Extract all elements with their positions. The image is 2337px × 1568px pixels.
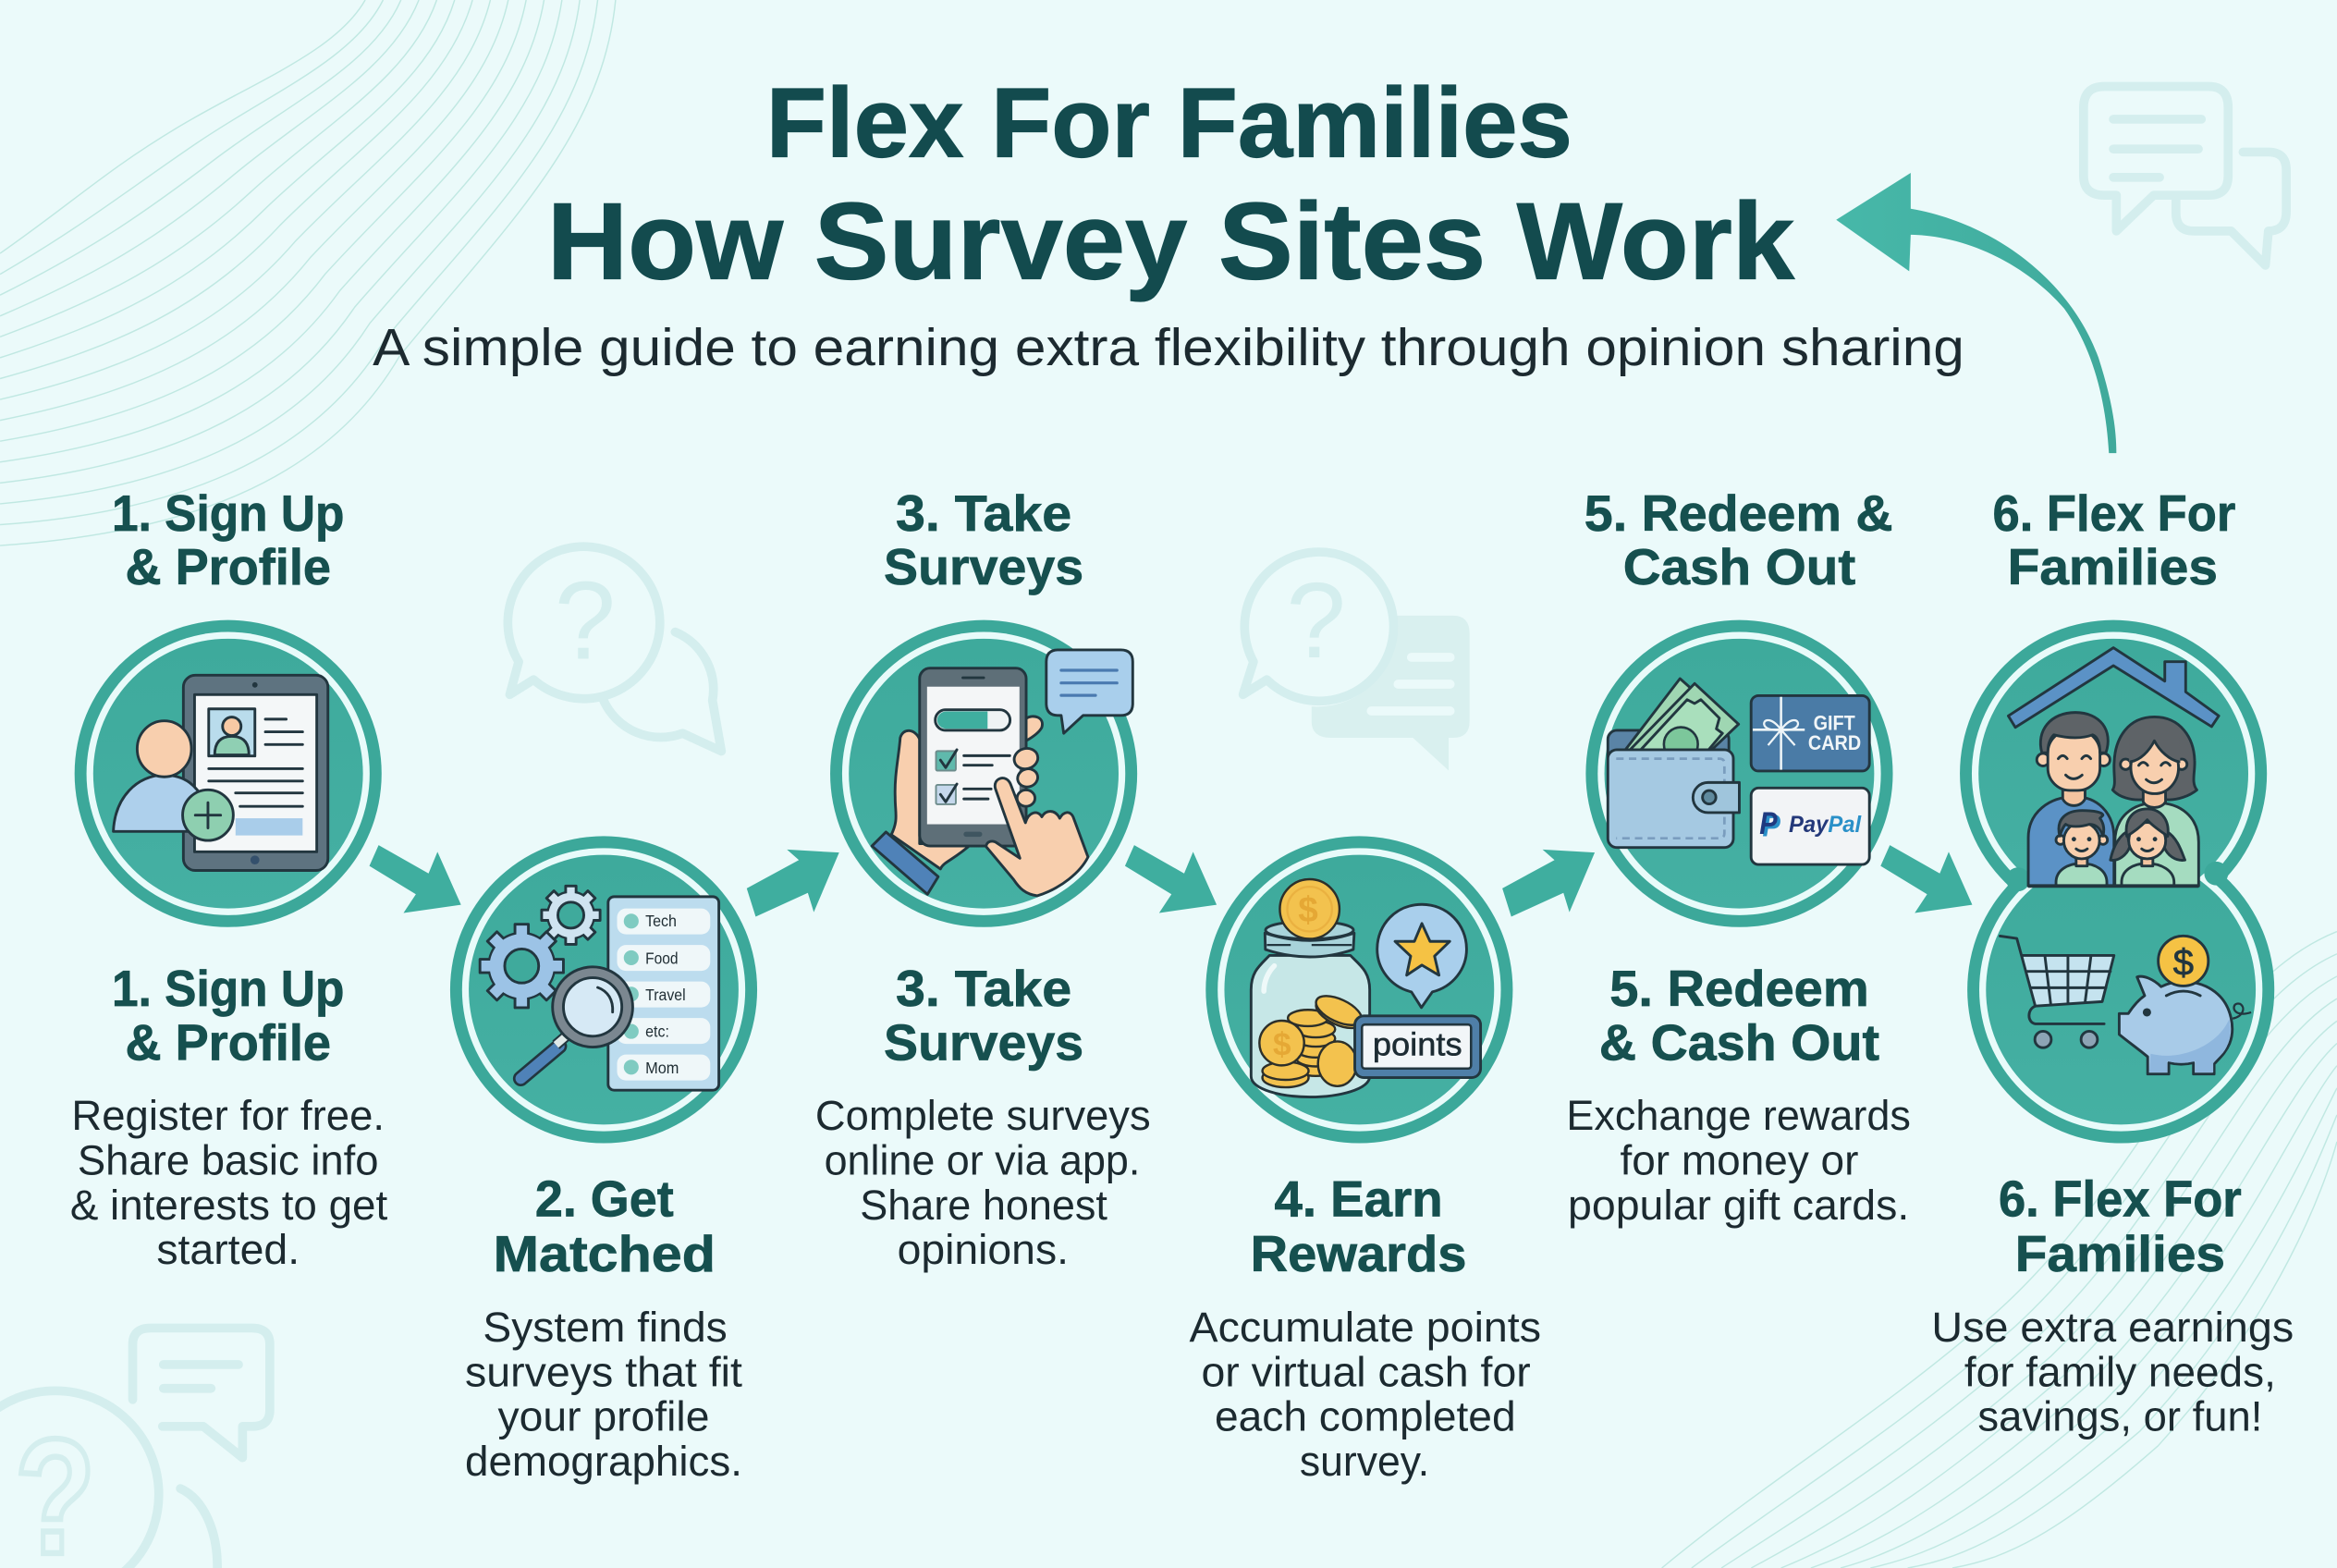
icon: coin jar: $ xyxy=(1298,890,1318,930)
heading: step 3 xyxy=(884,960,1083,1071)
icon: wallet with cash xyxy=(1608,679,1739,848)
icon: gift card xyxy=(1751,695,1869,771)
heading: step 1: 1. Sign Up xyxy=(112,960,344,1017)
text: step 2 description: demographics. xyxy=(465,1438,742,1485)
curved loop arrow xyxy=(1836,173,2116,453)
top heading: step 5: Cash Out xyxy=(1623,538,1855,595)
decorative background waves bottom right xyxy=(1662,932,2337,1568)
subtitle: A simple guide to earning extra flexibility through opinion sharing xyxy=(373,318,1964,376)
top heading: step 1: 1. Sign Up xyxy=(112,484,344,542)
text: step 5 description: for money or xyxy=(1620,1136,1858,1183)
top heading: step 1: & Profile xyxy=(125,538,331,595)
decorative chat bubbles top right xyxy=(2084,87,2286,265)
text: step 2 description xyxy=(465,1304,742,1485)
icon: interest list xyxy=(608,897,719,1090)
text: step 3 description: Complete surveys xyxy=(815,1092,1151,1139)
arrow: step 5 to 6 xyxy=(1880,845,1972,913)
heading: step 2: 2. Get xyxy=(535,1170,674,1228)
title: How Survey Sites Work xyxy=(547,179,1795,301)
icon: house roof xyxy=(2008,648,2219,728)
top heading: step 3 xyxy=(884,484,1083,595)
decorative question and message bubble centre right: ? xyxy=(1286,560,1346,680)
icon: interest list: Travel xyxy=(645,986,686,1004)
icon: speech bubble xyxy=(1046,650,1132,733)
top heading: step 6 xyxy=(1993,484,2235,595)
top heading: step 3: Surveys xyxy=(884,538,1083,595)
icon: coin jar: $ xyxy=(1273,1025,1291,1062)
arrow: step 4 to 5 xyxy=(1502,850,1595,916)
icon: PayPal card: P xyxy=(1759,806,1778,841)
text: step 2 description: surveys that fit xyxy=(465,1348,742,1395)
text: step 1 description: Register for free. xyxy=(71,1092,385,1139)
badge circle step 3 xyxy=(830,620,1137,927)
icon: PayPal card: P xyxy=(1762,808,1780,843)
text: step 1 description xyxy=(70,1092,388,1273)
text: step 1 description: & interests to get xyxy=(70,1182,388,1229)
panel: step 5 redeem xyxy=(1566,620,1911,1229)
title: Flex For Families xyxy=(766,67,1572,178)
badge circle step 1 xyxy=(75,620,382,927)
text: step 4 description: or virtual cash for xyxy=(1201,1348,1531,1395)
icon: family xyxy=(2028,713,2198,886)
heading: step 3: Surveys xyxy=(884,1013,1083,1071)
icon: interest list: etc: xyxy=(645,1022,669,1040)
decorative question bubble centre left: ? xyxy=(555,560,616,683)
text: step 4 description: each completed xyxy=(1215,1393,1516,1440)
icon: PayPal card xyxy=(1751,788,1869,864)
text: step 3 description: Share honest xyxy=(860,1182,1107,1229)
decorative question bubble centre left xyxy=(508,546,721,752)
heading: step 3: 3. Take xyxy=(896,960,1071,1017)
top heading: step 3: 3. Take xyxy=(896,484,1071,542)
icon: shopping cart xyxy=(2000,936,2114,1047)
heading: step 4: Rewards xyxy=(1251,1225,1466,1282)
icon: points label xyxy=(1355,1016,1481,1078)
top heading: step 1 xyxy=(112,484,344,595)
badge circle step 5 xyxy=(1585,620,1893,927)
icon: large gear xyxy=(480,925,563,1008)
heading: step 5: & Cash Out xyxy=(1599,1013,1879,1071)
text: step 2 description: System finds xyxy=(483,1304,728,1351)
icon: small gear xyxy=(542,886,600,944)
text: step 3 description: opinions. xyxy=(898,1226,1069,1273)
decorative question and message bubble centre right xyxy=(1243,552,1470,770)
icon: interest list: Tech xyxy=(645,912,677,930)
arrow: step 1 to 2 xyxy=(370,845,461,913)
icon: piggy bank with coin: $ xyxy=(2173,941,2194,983)
text: step 6 description: savings, or fun! xyxy=(1977,1393,2262,1440)
text: step 3 description xyxy=(815,1092,1151,1273)
badge circle step 4 xyxy=(1205,836,1512,1144)
icon: star bubble xyxy=(1377,904,1466,1008)
heading: step 1 xyxy=(112,960,344,1071)
top heading: step 5 xyxy=(1585,484,1893,595)
badge figure-eight circles step 6 xyxy=(1960,620,2274,1144)
heading: step 6 xyxy=(1999,1170,2242,1282)
text: step 5 description xyxy=(1566,1092,1911,1229)
text: step 4 description: survey. xyxy=(1300,1438,1429,1485)
decorative background waves top left xyxy=(0,0,616,545)
text: step 6 description: Use extra earnings xyxy=(1931,1304,2294,1351)
top heading: step 6: Families xyxy=(2008,538,2218,595)
icon: PayPal card: PayPal xyxy=(1789,812,1862,838)
text: step 4 description: Accumulate points xyxy=(1190,1304,1541,1351)
text: step 5 description: popular gift cards. xyxy=(1568,1182,1909,1229)
text: step 1 description: Share basic info xyxy=(78,1136,379,1183)
decorative bubbles bottom left xyxy=(0,1328,270,1568)
panel: step 4 earn rewards xyxy=(1190,836,1541,1485)
icon: magnifying glass xyxy=(520,967,632,1079)
heading: step 5: 5. Redeem xyxy=(1609,960,1869,1017)
text: step 1 description: started. xyxy=(156,1226,300,1273)
arrow: step 3 to 4 xyxy=(1125,845,1217,913)
text: step 6 description: for family needs, xyxy=(1964,1348,2276,1395)
heading: step 2 xyxy=(494,1170,716,1282)
panel: step 3 take surveys xyxy=(815,620,1151,1273)
icon: interest list: Mom xyxy=(645,1059,679,1077)
text: step 2 description: your profile xyxy=(498,1393,709,1440)
badge circle step 2 xyxy=(450,836,757,1144)
heading: step 2: Matched xyxy=(494,1225,716,1282)
top heading: step 5: 5. Redeem & xyxy=(1585,484,1893,542)
icon: hand holding phone with survey xyxy=(872,668,1088,896)
icon: gift card: GIFT xyxy=(1814,711,1855,734)
icon: points label: points xyxy=(1373,1025,1462,1062)
panel: step 2 get matched xyxy=(450,836,757,1485)
text: step 3 description: online or via app. xyxy=(825,1136,1140,1183)
title xyxy=(547,67,1795,301)
text: step 5 description: Exchange rewards xyxy=(1566,1092,1911,1139)
panel: step 1 sign up xyxy=(70,620,388,1273)
heading: step 4 xyxy=(1251,1170,1466,1282)
icon: tablet with profile form and person xyxy=(114,675,328,871)
top heading: step 6: 6. Flex For xyxy=(1993,484,2235,542)
icon: gift card: CARD xyxy=(1808,731,1861,754)
arrow: step 2 to 3 xyxy=(747,850,839,916)
panel: step 6 flex for families xyxy=(1931,620,2294,1440)
heading: step 6: Families xyxy=(2015,1225,2225,1282)
heading: step 4: 4. Earn xyxy=(1274,1170,1443,1228)
text: step 6 description xyxy=(1931,1304,2294,1440)
heading: step 5 xyxy=(1599,960,1879,1071)
heading: step 1: & Profile xyxy=(125,1013,331,1071)
icon: coin jar xyxy=(1251,879,1370,1097)
text: step 4 description xyxy=(1190,1304,1541,1485)
heading: step 6: 6. Flex For xyxy=(1999,1170,2242,1228)
icon: piggy bank with coin xyxy=(2119,936,2251,1074)
icon: interest list: Food xyxy=(645,949,679,967)
